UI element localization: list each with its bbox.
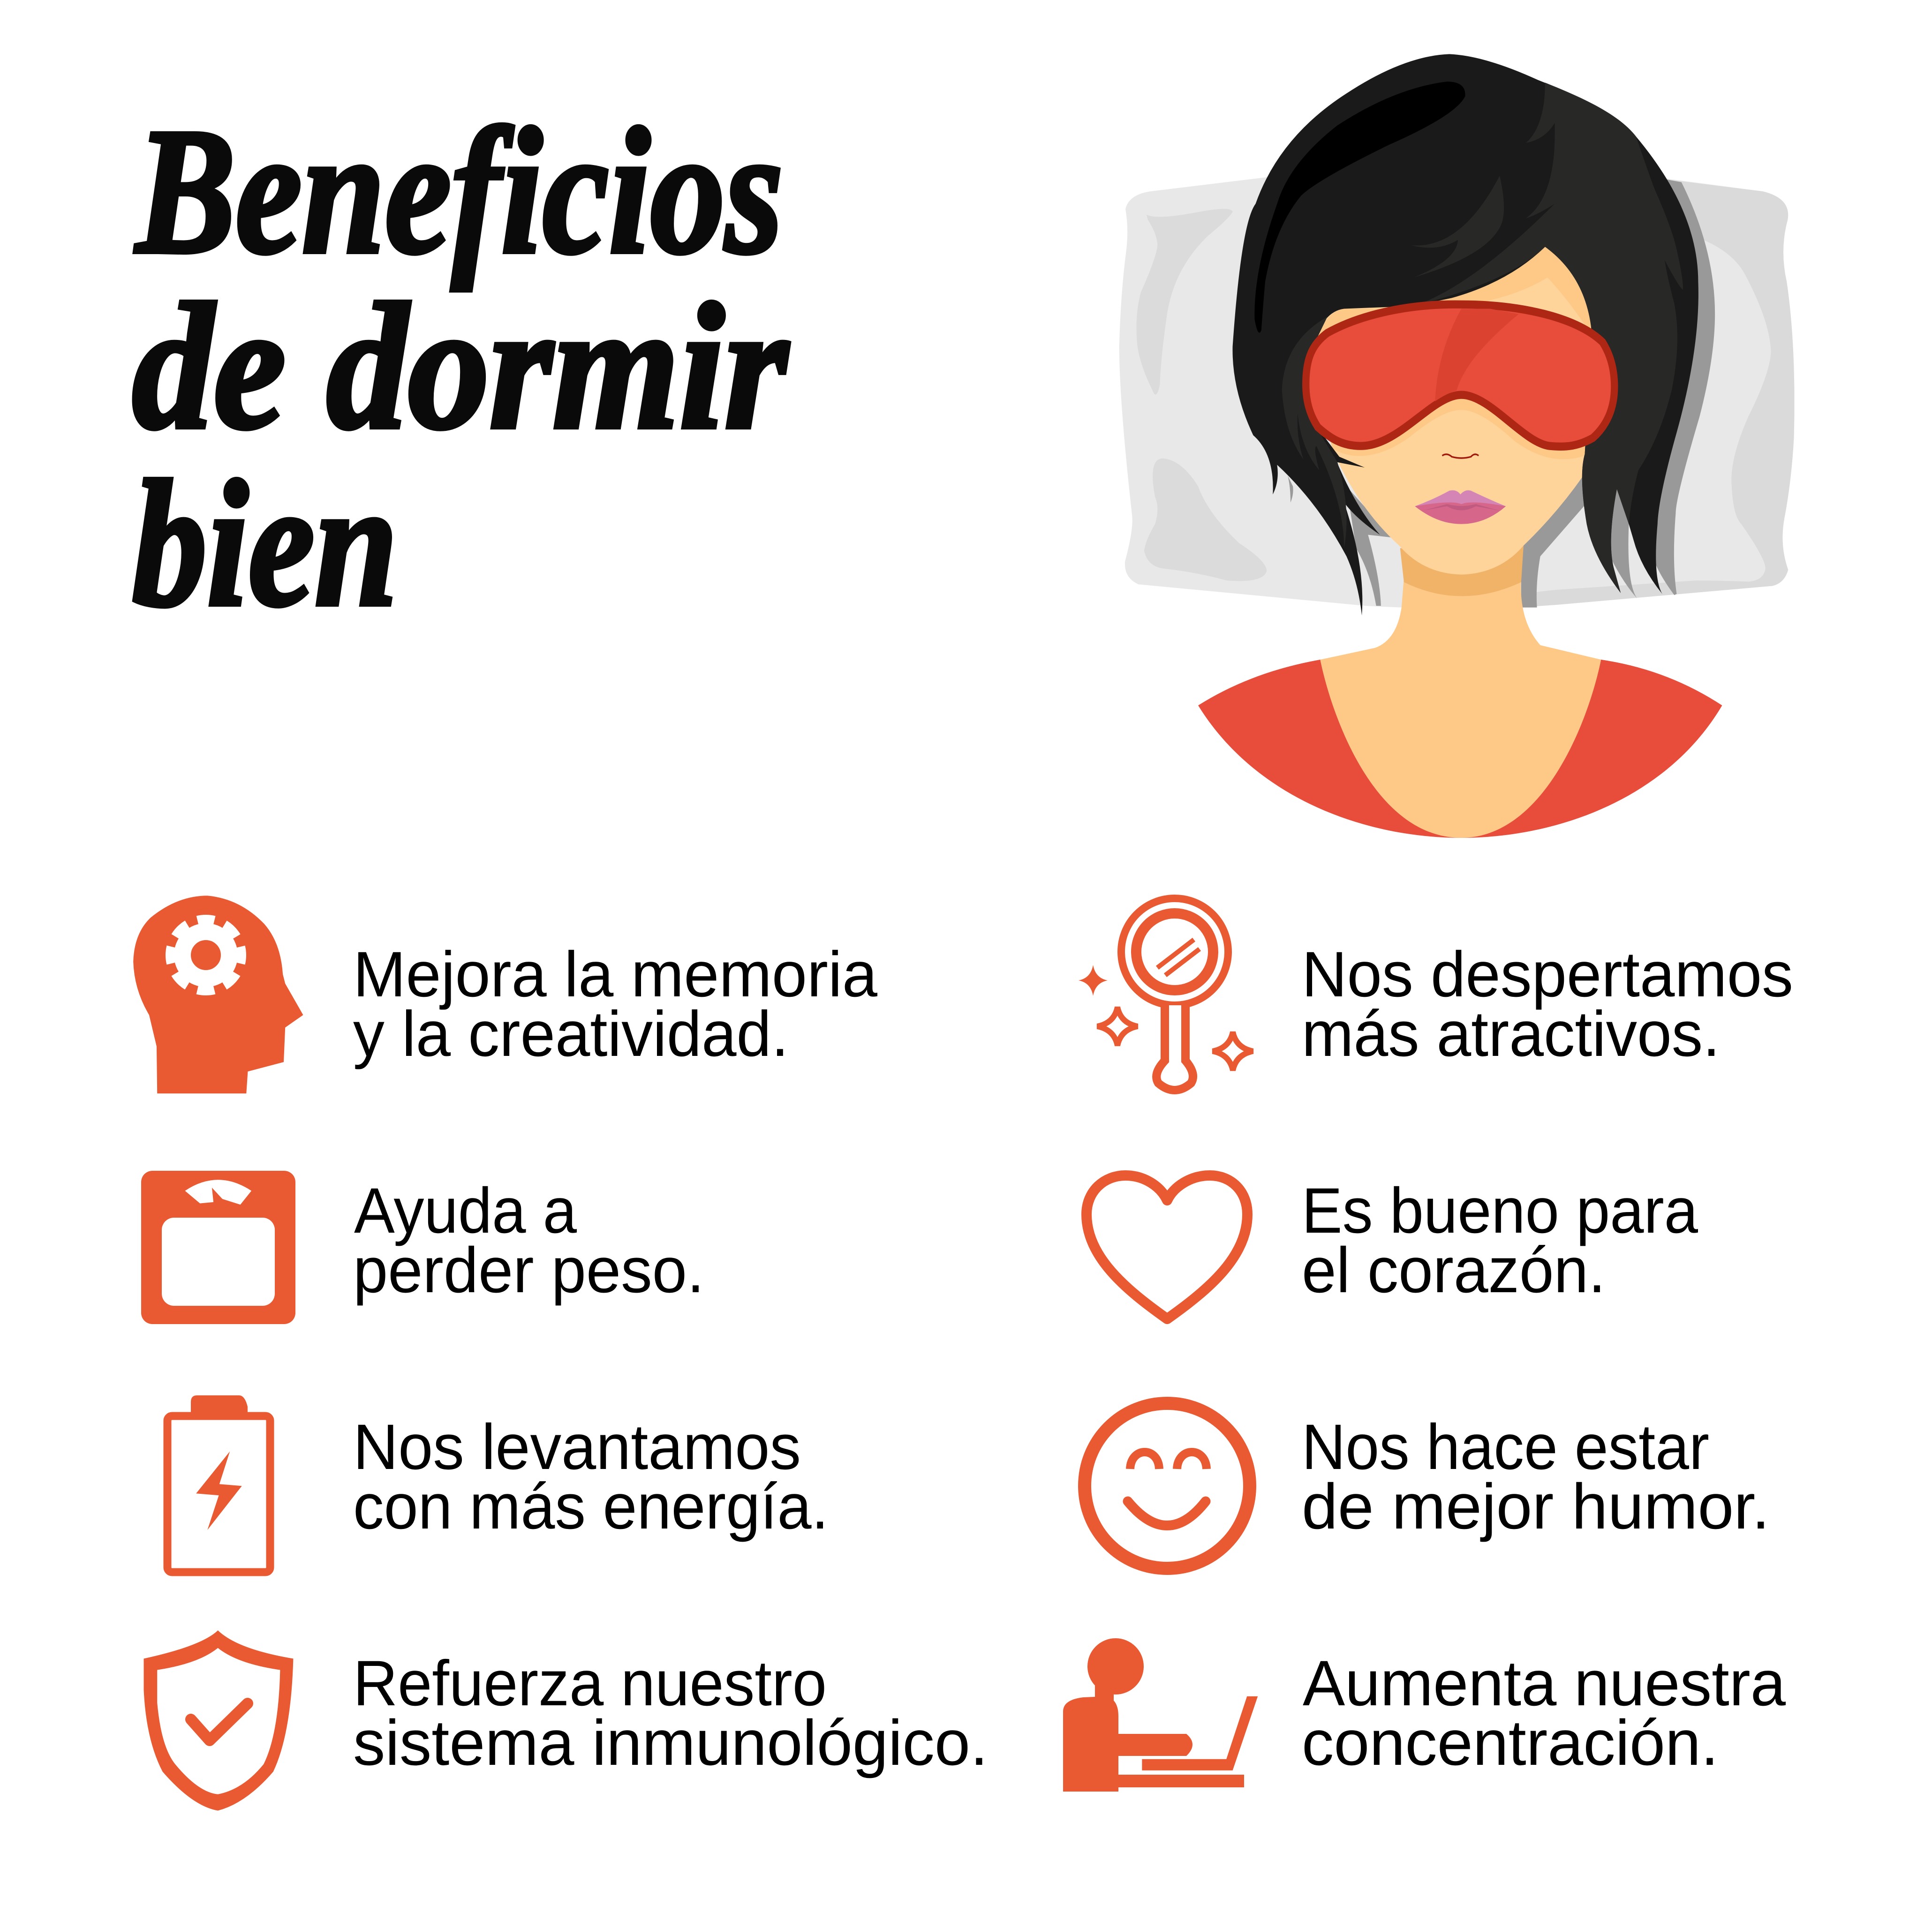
text: Ayuda a — [354, 1175, 577, 1247]
benefit 8: concentration — [1063, 1638, 1786, 1792]
text: el corazón. — [1302, 1235, 1606, 1306]
icon: heart outline — [1087, 1175, 1247, 1319]
face — [1313, 247, 1592, 575]
benefit 5: more attractive — [1079, 898, 1793, 1090]
text: más atractivos. — [1302, 998, 1720, 1070]
title: bien — [132, 444, 398, 644]
text — [353, 1411, 829, 1543]
benefit 2: lose weight — [141, 1171, 704, 1324]
text: Refuerza nuestro — [353, 1648, 827, 1719]
text — [353, 1648, 988, 1779]
text — [353, 939, 878, 1070]
pillow — [1119, 177, 1795, 608]
text — [1302, 1411, 1770, 1543]
text: Es bueno para — [1302, 1175, 1698, 1247]
hair shadow — [1288, 180, 1715, 608]
text: perder peso. — [353, 1235, 704, 1306]
icon: head with gear — [133, 896, 303, 1093]
benefit 4: immune system — [144, 1630, 988, 1811]
text — [1302, 1648, 1786, 1779]
icon: battery with bolt — [167, 1395, 270, 1572]
text: con más energía. — [353, 1471, 829, 1543]
icon: person at laptop — [1063, 1638, 1258, 1792]
text — [353, 1175, 704, 1306]
text — [1302, 1175, 1698, 1306]
title: de dormir — [132, 267, 791, 467]
icon: smiling face — [1085, 1403, 1250, 1568]
illustration: woman sleeping with eye mask — [1119, 54, 1795, 838]
text: sistema inmunológico. — [353, 1707, 988, 1779]
nose — [1442, 454, 1479, 458]
benefit 1: memory and creativity — [133, 896, 878, 1093]
benefit 3: more energy — [167, 1395, 829, 1572]
text: Nos hace estar — [1302, 1411, 1709, 1483]
hair — [1232, 54, 1698, 616]
text: Mejora la memoria — [353, 939, 878, 1010]
benefit 6: good for the heart — [1087, 1175, 1698, 1319]
torso and shirt — [1198, 546, 1722, 838]
text — [1302, 939, 1793, 1070]
title: Beneficios — [134, 91, 783, 291]
text: de mejor humor. — [1302, 1471, 1770, 1543]
text: Aumenta nuestra — [1303, 1648, 1786, 1719]
lips — [1415, 490, 1506, 524]
icon: shield with check — [144, 1630, 293, 1811]
benefit 7: better mood — [1085, 1403, 1770, 1568]
icon: bathroom scale — [141, 1171, 295, 1324]
text: Nos despertamos — [1302, 939, 1793, 1010]
icon: hand mirror with sparkles — [1079, 898, 1253, 1090]
text: concentración. — [1302, 1707, 1719, 1779]
text: Nos levantamos — [353, 1411, 801, 1483]
text: y la creatividad. — [353, 998, 789, 1070]
sleep mask — [1306, 304, 1615, 446]
title — [132, 91, 791, 644]
